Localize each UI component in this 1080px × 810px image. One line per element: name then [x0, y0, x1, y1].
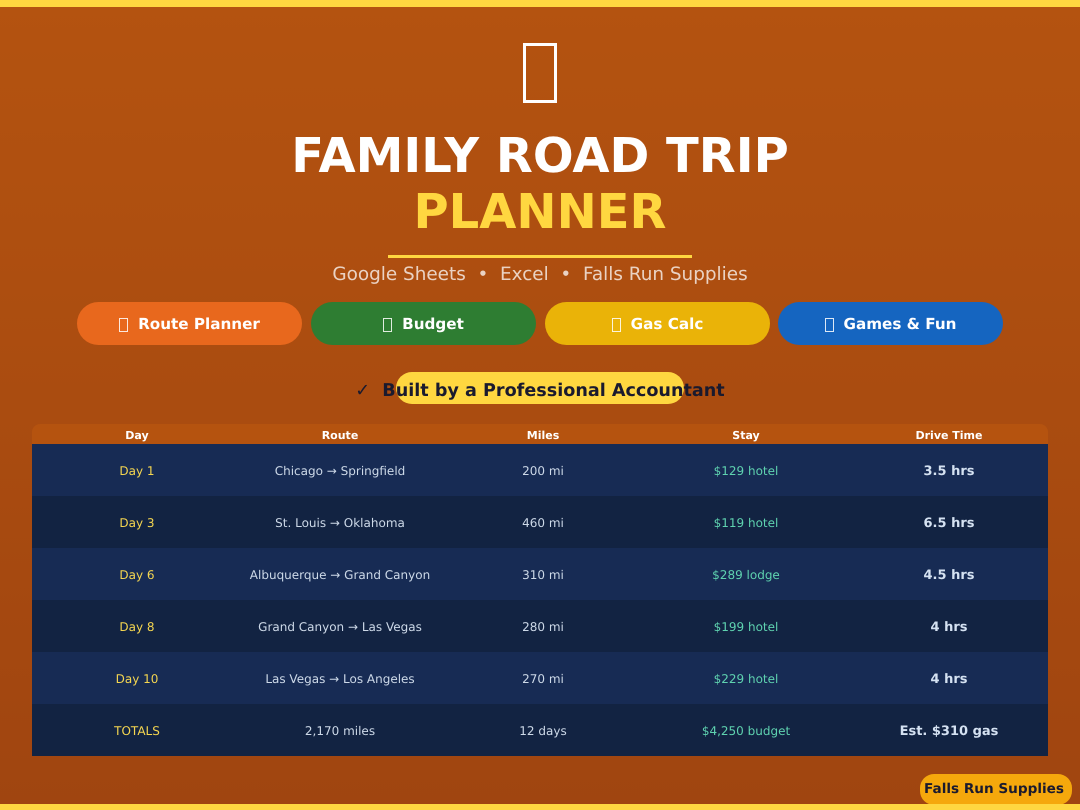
row: day 8: 280 mi	[522, 620, 564, 634]
table header: Drive Time	[916, 429, 982, 442]
row: day 3: 460 mi	[522, 516, 564, 530]
title: PLANNER	[413, 184, 666, 240]
pill: games and fun: Games & Fun	[844, 315, 956, 333]
table header: Stay	[732, 429, 760, 442]
pill: gas calc: Gas Calc	[631, 315, 703, 333]
row: totals: $4,250 budget	[702, 724, 790, 738]
row: totals: 2,170 miles	[305, 724, 375, 738]
row: day 3: $119 hotel	[714, 516, 778, 530]
row: day 10	[32, 652, 1048, 704]
row: day 6: Albuquerque → Grand Canyon	[250, 568, 430, 582]
table header: Day	[125, 429, 149, 442]
row: day 1: 200 mi	[522, 464, 564, 478]
top accent bar	[0, 0, 1080, 7]
pill: budget	[311, 302, 536, 345]
title: FAMILY ROAD TRIP	[291, 128, 789, 184]
pill: budget: Budget	[402, 315, 464, 333]
row: day 8	[32, 600, 1048, 652]
row: totals: TOTALS	[114, 724, 160, 738]
pill: gas calc	[545, 302, 770, 345]
row: day 1: Chicago → Springfield	[275, 464, 405, 478]
row: day 6: $289 lodge	[712, 568, 780, 582]
pill: games and fun	[778, 302, 1003, 345]
icon: missing-glyph box	[523, 43, 557, 103]
row: day 6	[32, 548, 1048, 600]
footer brand badge: Falls Run Supplies	[924, 781, 1064, 797]
row: totals: Est. $310 gas	[900, 724, 998, 739]
row: totals	[32, 704, 1048, 756]
row: day 1: $129 hotel	[714, 464, 778, 478]
row: day 3: Day 3	[119, 516, 155, 530]
title	[291, 128, 789, 240]
row: day 6: Day 6	[119, 568, 155, 582]
badge: built by a professional accountant	[396, 372, 684, 404]
table header: Route	[322, 429, 358, 442]
row: day 8: Day 8	[119, 620, 155, 634]
badge text: ✓ Built by a Professional Accountant	[355, 381, 725, 401]
table header: Miles	[527, 429, 559, 442]
table: route schedule	[32, 424, 1048, 756]
table header	[32, 424, 1048, 444]
row: day 10: Las Vegas → Los Angeles	[265, 672, 415, 686]
row: day 1	[32, 444, 1048, 496]
row: day 1: 3.5 hrs	[924, 464, 974, 479]
pill: route planner: Route Planner	[138, 315, 260, 333]
bottom accent bar	[0, 804, 1080, 810]
row: day 3: 6.5 hrs	[924, 516, 974, 531]
row: totals: 12 days	[519, 724, 567, 738]
row: day 10: Day 10	[116, 672, 158, 686]
row: day 10: $229 hotel	[714, 672, 778, 686]
row: day 10: 4 hrs	[930, 672, 967, 687]
title divider	[388, 255, 692, 258]
row: day 10: 270 mi	[522, 672, 564, 686]
row: day 3: St. Louis → Oklahoma	[275, 516, 405, 530]
row: day 8: $199 hotel	[714, 620, 778, 634]
row: day 1: Day 1	[119, 464, 155, 478]
row: day 6: 310 mi	[522, 568, 564, 582]
footer brand badge	[920, 774, 1072, 805]
row: day 8: 4 hrs	[930, 620, 967, 635]
row: day 3	[32, 496, 1048, 548]
pill: route planner	[77, 302, 302, 345]
row: day 8: Grand Canyon → Las Vegas	[258, 620, 422, 634]
row: day 6: 4.5 hrs	[924, 568, 974, 583]
subtitle: Google Sheets • Excel • Falls Run Supplies	[332, 264, 748, 285]
